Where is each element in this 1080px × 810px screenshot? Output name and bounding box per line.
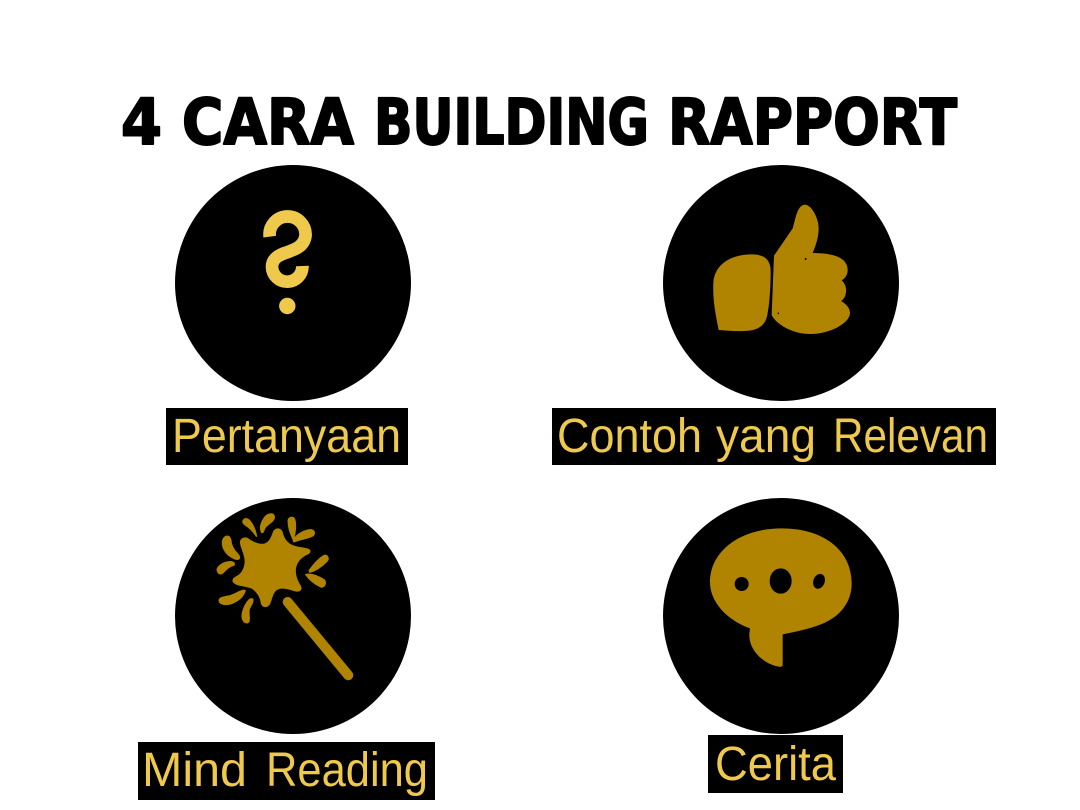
- panel: Pertanyaan: [166, 165, 411, 465]
- label: Contoh yang Relevan: [552, 408, 996, 465]
- label: Contoh yang Relevan: Contoh: [557, 410, 702, 463]
- panel: Cerita: [663, 498, 899, 793]
- title: RAPPORT: [668, 86, 957, 159]
- label: Mind Reading: Reading: [266, 744, 428, 797]
- icon: speech bubble: [710, 528, 852, 667]
- label: Mind Reading: [138, 742, 435, 800]
- circle: Cerita: [663, 498, 899, 734]
- panel: Contoh yang Relevan: [552, 165, 996, 465]
- icon: magic wand: [217, 514, 348, 675]
- circle: Pertanyaan: [175, 165, 411, 401]
- circle: Mind Reading: [175, 498, 411, 734]
- label: Pertanyaan: Pertanyaan: [172, 410, 401, 463]
- label: Contoh yang Relevan: Relevan: [833, 410, 988, 463]
- label: Mind Reading: Mind: [142, 744, 247, 797]
- title: 4: [121, 86, 162, 159]
- label: Cerita: Cerita: [715, 738, 836, 791]
- label: Contoh yang Relevan: yang: [716, 410, 816, 463]
- title: BUILDING: [374, 86, 649, 159]
- icon: thumbs up: [713, 205, 850, 334]
- circle: Contoh yang Relevan: [663, 165, 899, 401]
- panel: Mind Reading: [138, 498, 435, 800]
- title: CARA: [182, 86, 354, 159]
- icon: question mark: [270, 216, 306, 314]
